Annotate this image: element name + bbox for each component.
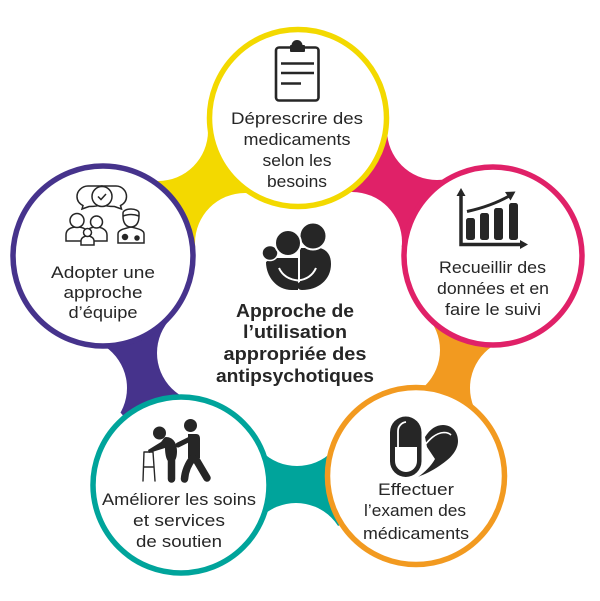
circle: teal: [93, 397, 269, 573]
label: orange step: médicaments: [363, 524, 469, 543]
title: center heading: antipsychotiques: [216, 366, 374, 386]
label: teal step: Améliorer les soins: [102, 490, 256, 509]
colored connector: yellow: [103, 118, 298, 256]
outer white notches: [27, 80, 570, 601]
title: center heading: l’utilisation: [243, 322, 347, 342]
icon: caregiver helping person with walker: [143, 419, 207, 481]
label: purple step: Adopter une: [51, 263, 155, 282]
circle: pink: [404, 167, 582, 345]
colored connector: purple: [100, 256, 207, 485]
label: pink step: faire le suivi: [445, 300, 541, 319]
label: pink step: [437, 258, 549, 319]
label: teal step: de soutien: [136, 532, 222, 551]
icon: clipboard: [276, 40, 318, 100]
label: purple step: d’équipe: [68, 303, 138, 322]
title: center heading: appropriée des: [224, 344, 366, 364]
title: center heading: [216, 301, 374, 386]
title: center heading: Approche de: [236, 301, 354, 321]
label: yellow step: Déprescrire des: [231, 109, 363, 128]
icon: family embrace: [262, 222, 331, 290]
label: orange step: [363, 480, 469, 543]
label: yellow step: medicaments: [244, 130, 350, 149]
circle: yellow: [210, 30, 386, 206]
label: yellow step: besoins: [267, 172, 327, 191]
label: orange step: l’examen des: [364, 501, 466, 520]
label: pink step: Recueillir des: [439, 258, 546, 277]
label: purple step: [51, 263, 155, 322]
label: purple step: approche: [64, 283, 142, 302]
central white blob: [157, 192, 440, 466]
colored connector: teal: [181, 416, 416, 553]
label: orange step: Effectuer: [378, 480, 454, 499]
label: pink step: données et en: [437, 279, 549, 298]
circle: purple: [13, 166, 193, 346]
colored connector: pink: [298, 118, 493, 256]
label: teal step: et services: [133, 511, 225, 530]
icon: capsule and heart pill: [390, 416, 458, 477]
icon: care team: [66, 186, 144, 245]
circle: orange: [328, 388, 504, 564]
label: yellow step: selon les: [262, 151, 332, 170]
icon: rising bar chart: [456, 188, 528, 249]
label: teal step: [102, 490, 256, 551]
label: yellow step: [231, 109, 363, 191]
colored connector: orange: [390, 256, 521, 476]
